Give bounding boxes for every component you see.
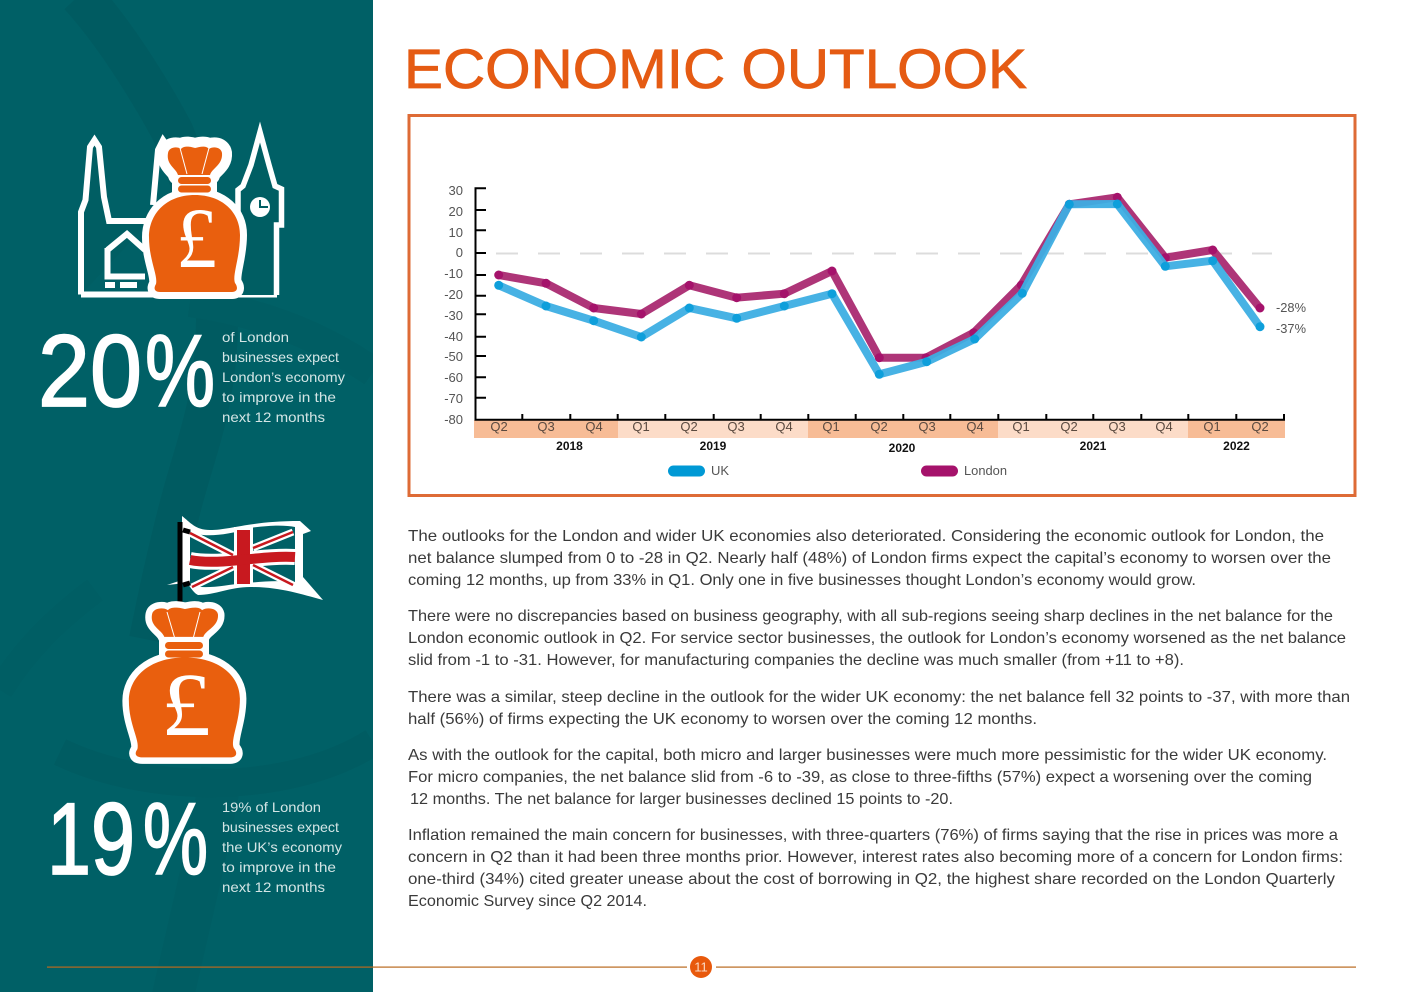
text: London economy stat description: of London — [222, 329, 289, 345]
chart: y axis labels: 10 — [449, 225, 463, 240]
chart: quarter labels: Q1 — [1012, 419, 1030, 434]
text: London economy stat description — [222, 329, 345, 425]
text block: paragraph 1: The outlooks for the London and wider UK economies also deteriorated. Considering the economic outlook for London, the — [408, 528, 1324, 545]
chart: y axis labels: -40 — [444, 329, 463, 344]
chart: year labels: 2018 — [556, 439, 583, 453]
text block: paragraph 3 — [408, 689, 1350, 728]
icon: Union flag on pole — [167, 516, 323, 603]
text block: paragraph 1 — [408, 528, 1331, 589]
panel: teal sidebar — [0, 0, 373, 992]
text: UK economy stat description: businesses expect — [222, 819, 339, 835]
chart: quarter bands — [474, 420, 1285, 438]
chart: quarter labels: Q4 — [1155, 419, 1173, 434]
text block: paragraph 1: coming 12 months, up from 33% in Q1. Only one in five businesses thought London’s economy would grow. — [408, 572, 1196, 589]
icon: house — [105, 234, 145, 288]
text block: paragraph 5: Inflation remained the main concern for businesses, with three-quarters (76%) of firms saying that the rise in prices was more a — [408, 827, 1338, 844]
legend: London: London — [964, 463, 1007, 478]
text block: paragraph 4: 12 months. The net balance for larger businesses declined 15 points to -20. — [410, 791, 953, 808]
chart: y axis labels: -10 — [444, 266, 463, 281]
chart: y axis labels: 0 — [456, 245, 463, 260]
chart: quarter labels: Q4 — [585, 419, 603, 434]
text block: paragraph 4: For micro companies, the net balance slid from -6 to -39, as close to three-fifths (57%) expect a worsening over the coming — [408, 769, 1312, 786]
chart: quarter labels: Q1 — [822, 419, 840, 434]
icon: money bag 2 — [129, 608, 240, 757]
chart: y axis labels: -50 — [444, 349, 463, 364]
icon: clock tower — [238, 132, 282, 295]
chart: year labels: 2022 — [1223, 439, 1250, 453]
text: UK economy stat description: to improve in the — [222, 859, 336, 875]
chart: quarter labels: Q3 — [1108, 419, 1126, 434]
chart: y axis labels: -70 — [444, 391, 463, 406]
text block: paragraph 5: one-third (34%) cited greater unease about the cost of borrowing in Q2, the highest share recorded on the London Quarterly — [408, 871, 1335, 888]
chart: axes and ticks — [474, 187, 1285, 420]
text: London economy stat description: businesses expect — [222, 349, 339, 365]
legend: UK: UK — [711, 463, 729, 478]
chart: quarter labels: Q3 — [537, 419, 555, 434]
icon: money bag 2: £ — [161, 656, 211, 755]
chart: quarter labels: Q1 — [1203, 419, 1221, 434]
title: ECONOMIC OUTLOOK — [404, 37, 1027, 100]
text block: paragraph 5: concern in Q2 than it had been three months prior. However, interest rates also becoming more of a concern for London firms: — [408, 849, 1343, 866]
chart: y axis labels: -80 — [444, 412, 463, 427]
chart: year labels: 2019 — [700, 439, 727, 453]
text block: paragraph 2: There were no discrepancies based on business geography, with all sub-regions seeing sharp declines in the net balance for the — [408, 608, 1333, 625]
text block: paragraph 4: As with the outlook for the capital, both micro and larger businesses were much more pessimistic for the wider UK economy. — [408, 747, 1327, 764]
text block: paragraph 4 — [408, 747, 1327, 808]
text block: paragraph 3: There was a similar, steep decline in the outlook for the wider UK economy: the net balance fell 32 points to -37, with more than — [408, 689, 1350, 706]
text: UK economy stat description — [222, 799, 342, 895]
icon: left spire and hall outline — [81, 140, 277, 294]
icon: London skyline with money bag — [81, 132, 282, 295]
text block: paragraph 2: London economic outlook in Q2. For service sector businesses, the outlook for London’s economy worsened as the net balance — [408, 630, 1346, 647]
chart: end value labels: -28% — [1276, 300, 1306, 315]
icon: money bag: £ — [176, 190, 217, 286]
chart: quarter labels: Q4 — [775, 419, 793, 434]
chart: y axis labels: -20 — [444, 287, 463, 302]
chart: UK line — [494, 200, 1264, 379]
chart: end value labels — [1276, 300, 1306, 336]
text: London economy stat description: London’s economy — [222, 369, 345, 385]
text: UK economy stat description: 19% of London — [222, 799, 321, 815]
chart: quarter labels: Q4 — [966, 419, 984, 434]
text: London economy stat description: next 12 months — [222, 409, 325, 425]
icon: money bag — [149, 147, 240, 292]
chart: quarter labels: Q2 — [1060, 419, 1078, 434]
stat: 19 percent: 19 — [47, 782, 135, 896]
chart: year labels — [556, 439, 1250, 455]
chart: y axis labels — [444, 183, 463, 427]
text block: paragraph 3: half (56%) of firms expecting the UK economy to worsen over the coming 12 months. — [408, 711, 1037, 728]
chart: quarter labels — [490, 419, 1269, 434]
legend: UK — [668, 463, 729, 478]
text block: paragraph 1: net balance slumped from 0 to -28 in Q2. Nearly half (48%) of London firms expect the capital’s economy to worsen over the — [408, 550, 1331, 567]
icon: middle spire — [153, 140, 170, 205]
legend: London — [921, 463, 1007, 478]
chart: zero dashed line — [496, 252, 1272, 254]
chart: quarter labels: Q2 — [490, 419, 508, 434]
stat: 19 percent: % — [143, 782, 208, 896]
chart: y axis labels: -60 — [444, 370, 463, 385]
text block: paragraph 2 — [408, 608, 1346, 669]
panel: line chart frame — [409, 116, 1355, 496]
chart: y axis labels: -30 — [444, 308, 463, 323]
footer: rule and page number — [47, 956, 1356, 978]
text block: paragraph 5 — [408, 827, 1343, 910]
chart: London line — [494, 193, 1264, 362]
chart: year labels: 2021 — [1080, 439, 1107, 453]
chart: quarter labels: Q1 — [632, 419, 650, 434]
chart: y axis labels: 30 — [449, 183, 463, 198]
chart: year labels: 2020 — [889, 441, 916, 455]
chart: quarter labels: Q2 — [680, 419, 698, 434]
chart: quarter labels: Q3 — [918, 419, 936, 434]
footer: rule and page number: 11 — [694, 960, 708, 974]
chart: quarter labels: Q2 — [1251, 419, 1269, 434]
text: UK economy stat description: the UK’s economy — [222, 839, 342, 855]
text: London economy stat description: to improve in the — [222, 389, 336, 405]
stat: 20 percent: 20 — [38, 314, 142, 428]
chart: y axis labels: 20 — [449, 204, 463, 219]
stat: 20 percent: % — [145, 314, 215, 428]
chart: quarter labels: Q2 — [870, 419, 888, 434]
chart: end value labels: -37% — [1276, 321, 1306, 336]
chart: quarter labels: Q3 — [727, 419, 745, 434]
text block: paragraph 5: Economic Survey since Q2 2014. — [408, 893, 647, 910]
text block: paragraph 2: slid from -1 to -31. However, for manufacturing companies the decline was much smaller (from +11 to +8). — [408, 652, 1184, 669]
text: UK economy stat description: next 12 months — [222, 879, 325, 895]
